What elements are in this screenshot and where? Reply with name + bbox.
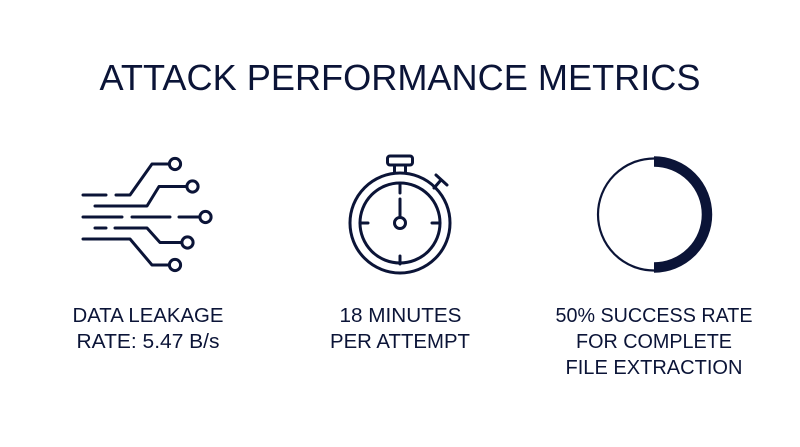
- icon: circuit data streams: [83, 158, 211, 271]
- label: data leakage: RATE: 5.47 B/s: [76, 331, 219, 353]
- label: success rate: FILE EXTRACTION: [566, 357, 742, 379]
- label: data leakage: DATA LEAKAGE: [72, 305, 224, 327]
- title: ATTACK PERFORMANCE METRICS: [100, 57, 700, 98]
- icon: stopwatch: [350, 156, 450, 273]
- label: minutes per attempt: [330, 305, 470, 353]
- label: data leakage: [72, 305, 224, 353]
- label: success rate: FOR COMPLETE: [576, 331, 732, 353]
- icon: half progress ring: [598, 158, 710, 270]
- label: minutes per attempt: PER ATTEMPT: [330, 331, 470, 353]
- label: success rate: [556, 305, 752, 379]
- label: minutes per attempt: 18 MINUTES: [340, 305, 462, 327]
- label: success rate: 50% SUCCESS RATE: [556, 305, 752, 327]
